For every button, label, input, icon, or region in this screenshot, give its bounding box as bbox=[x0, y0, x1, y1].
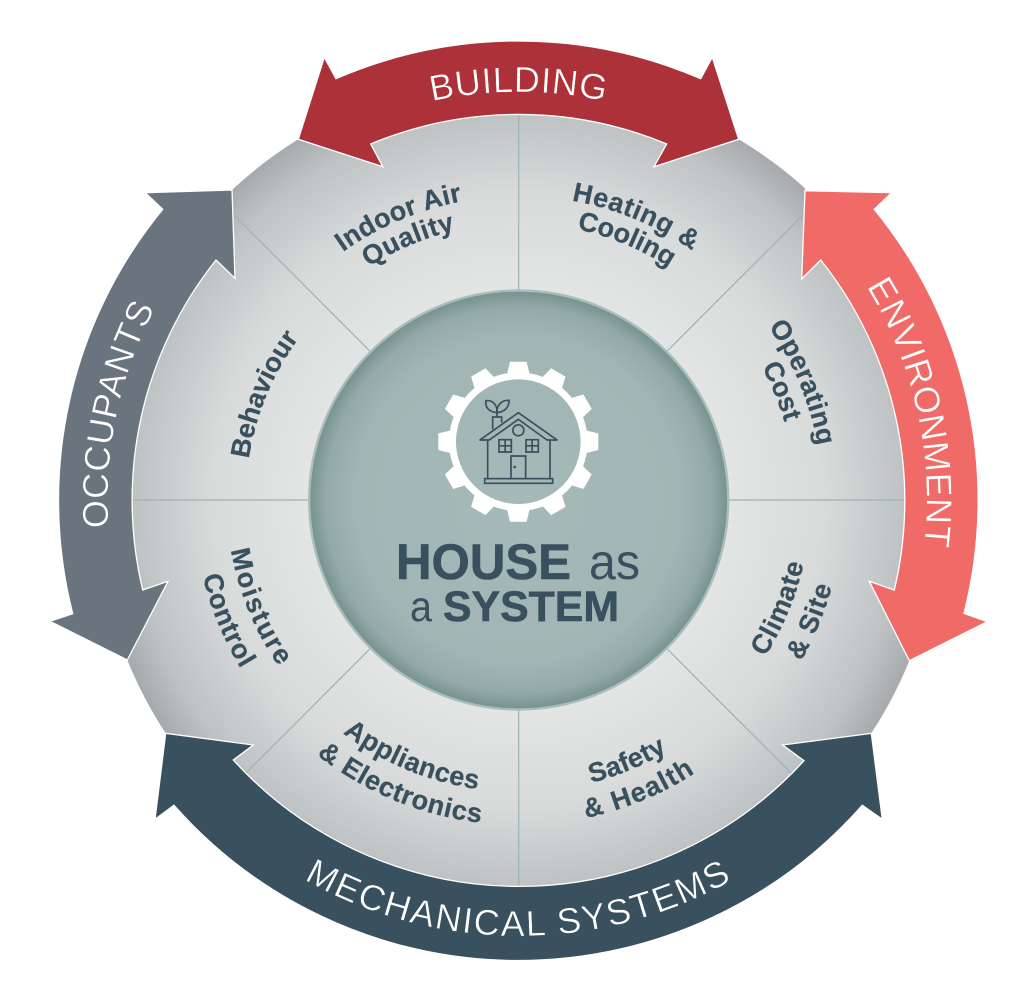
segment label: indoor air quality: Quality bbox=[362, 216, 452, 265]
segment label: climate and site: Climate bbox=[752, 562, 803, 654]
segment label: climate and site bbox=[752, 562, 831, 659]
segment label: indoor air quality: Indoor Air bbox=[334, 184, 460, 252]
icon: house with leaf bbox=[480, 400, 557, 483]
segmented disc bbox=[127, 110, 909, 890]
segment label: appliances and electronics: & Electronics bbox=[320, 744, 481, 822]
label: BUILDING: BUILDING bbox=[430, 67, 606, 101]
title: HOUSE as a SYSTEM: SYSTEM bbox=[443, 583, 619, 631]
title: HOUSE as a SYSTEM: HOUSE bbox=[396, 534, 571, 590]
segment label: appliances and electronics: Appliances bbox=[343, 722, 478, 788]
title: HOUSE as a SYSTEM: as bbox=[589, 534, 640, 590]
label: OCCUPANTS: OCCUPANTS bbox=[82, 302, 152, 526]
segment label: moisture control: Moisture bbox=[231, 548, 288, 664]
segment label: safety and health: & Health bbox=[586, 762, 694, 817]
segment label: behaviour: Behaviour bbox=[230, 330, 296, 458]
label: MECHANICAL SYSTEMS: MECHANICAL SYSTEMS bbox=[306, 859, 728, 936]
arrow: environment bbox=[802, 191, 987, 661]
arrow: mechanical systems bbox=[155, 733, 882, 961]
segment label: heating and cooling: Cooling bbox=[580, 212, 676, 270]
segment label: safety and health: Safety bbox=[588, 739, 663, 782]
segment label: operating cost: Cost bbox=[765, 362, 801, 422]
arrow: occupants bbox=[50, 190, 235, 660]
label: ENVIRONMENT: ENVIRONMENT bbox=[868, 276, 952, 548]
arrow: building bbox=[298, 41, 739, 167]
title: HOUSE as a SYSTEM bbox=[396, 534, 640, 631]
segment label: operating cost: Operating bbox=[772, 320, 832, 444]
title: HOUSE as a SYSTEM: a bbox=[410, 583, 432, 631]
central hub circle bbox=[309, 290, 728, 710]
segment label: climate and site: & Site bbox=[788, 584, 831, 659]
segment label: heating and cooling: Heating & bbox=[573, 182, 697, 250]
segment label: moisture control bbox=[204, 548, 288, 668]
segment label: moisture control: Control bbox=[204, 574, 257, 668]
icon: gear bbox=[438, 362, 598, 522]
